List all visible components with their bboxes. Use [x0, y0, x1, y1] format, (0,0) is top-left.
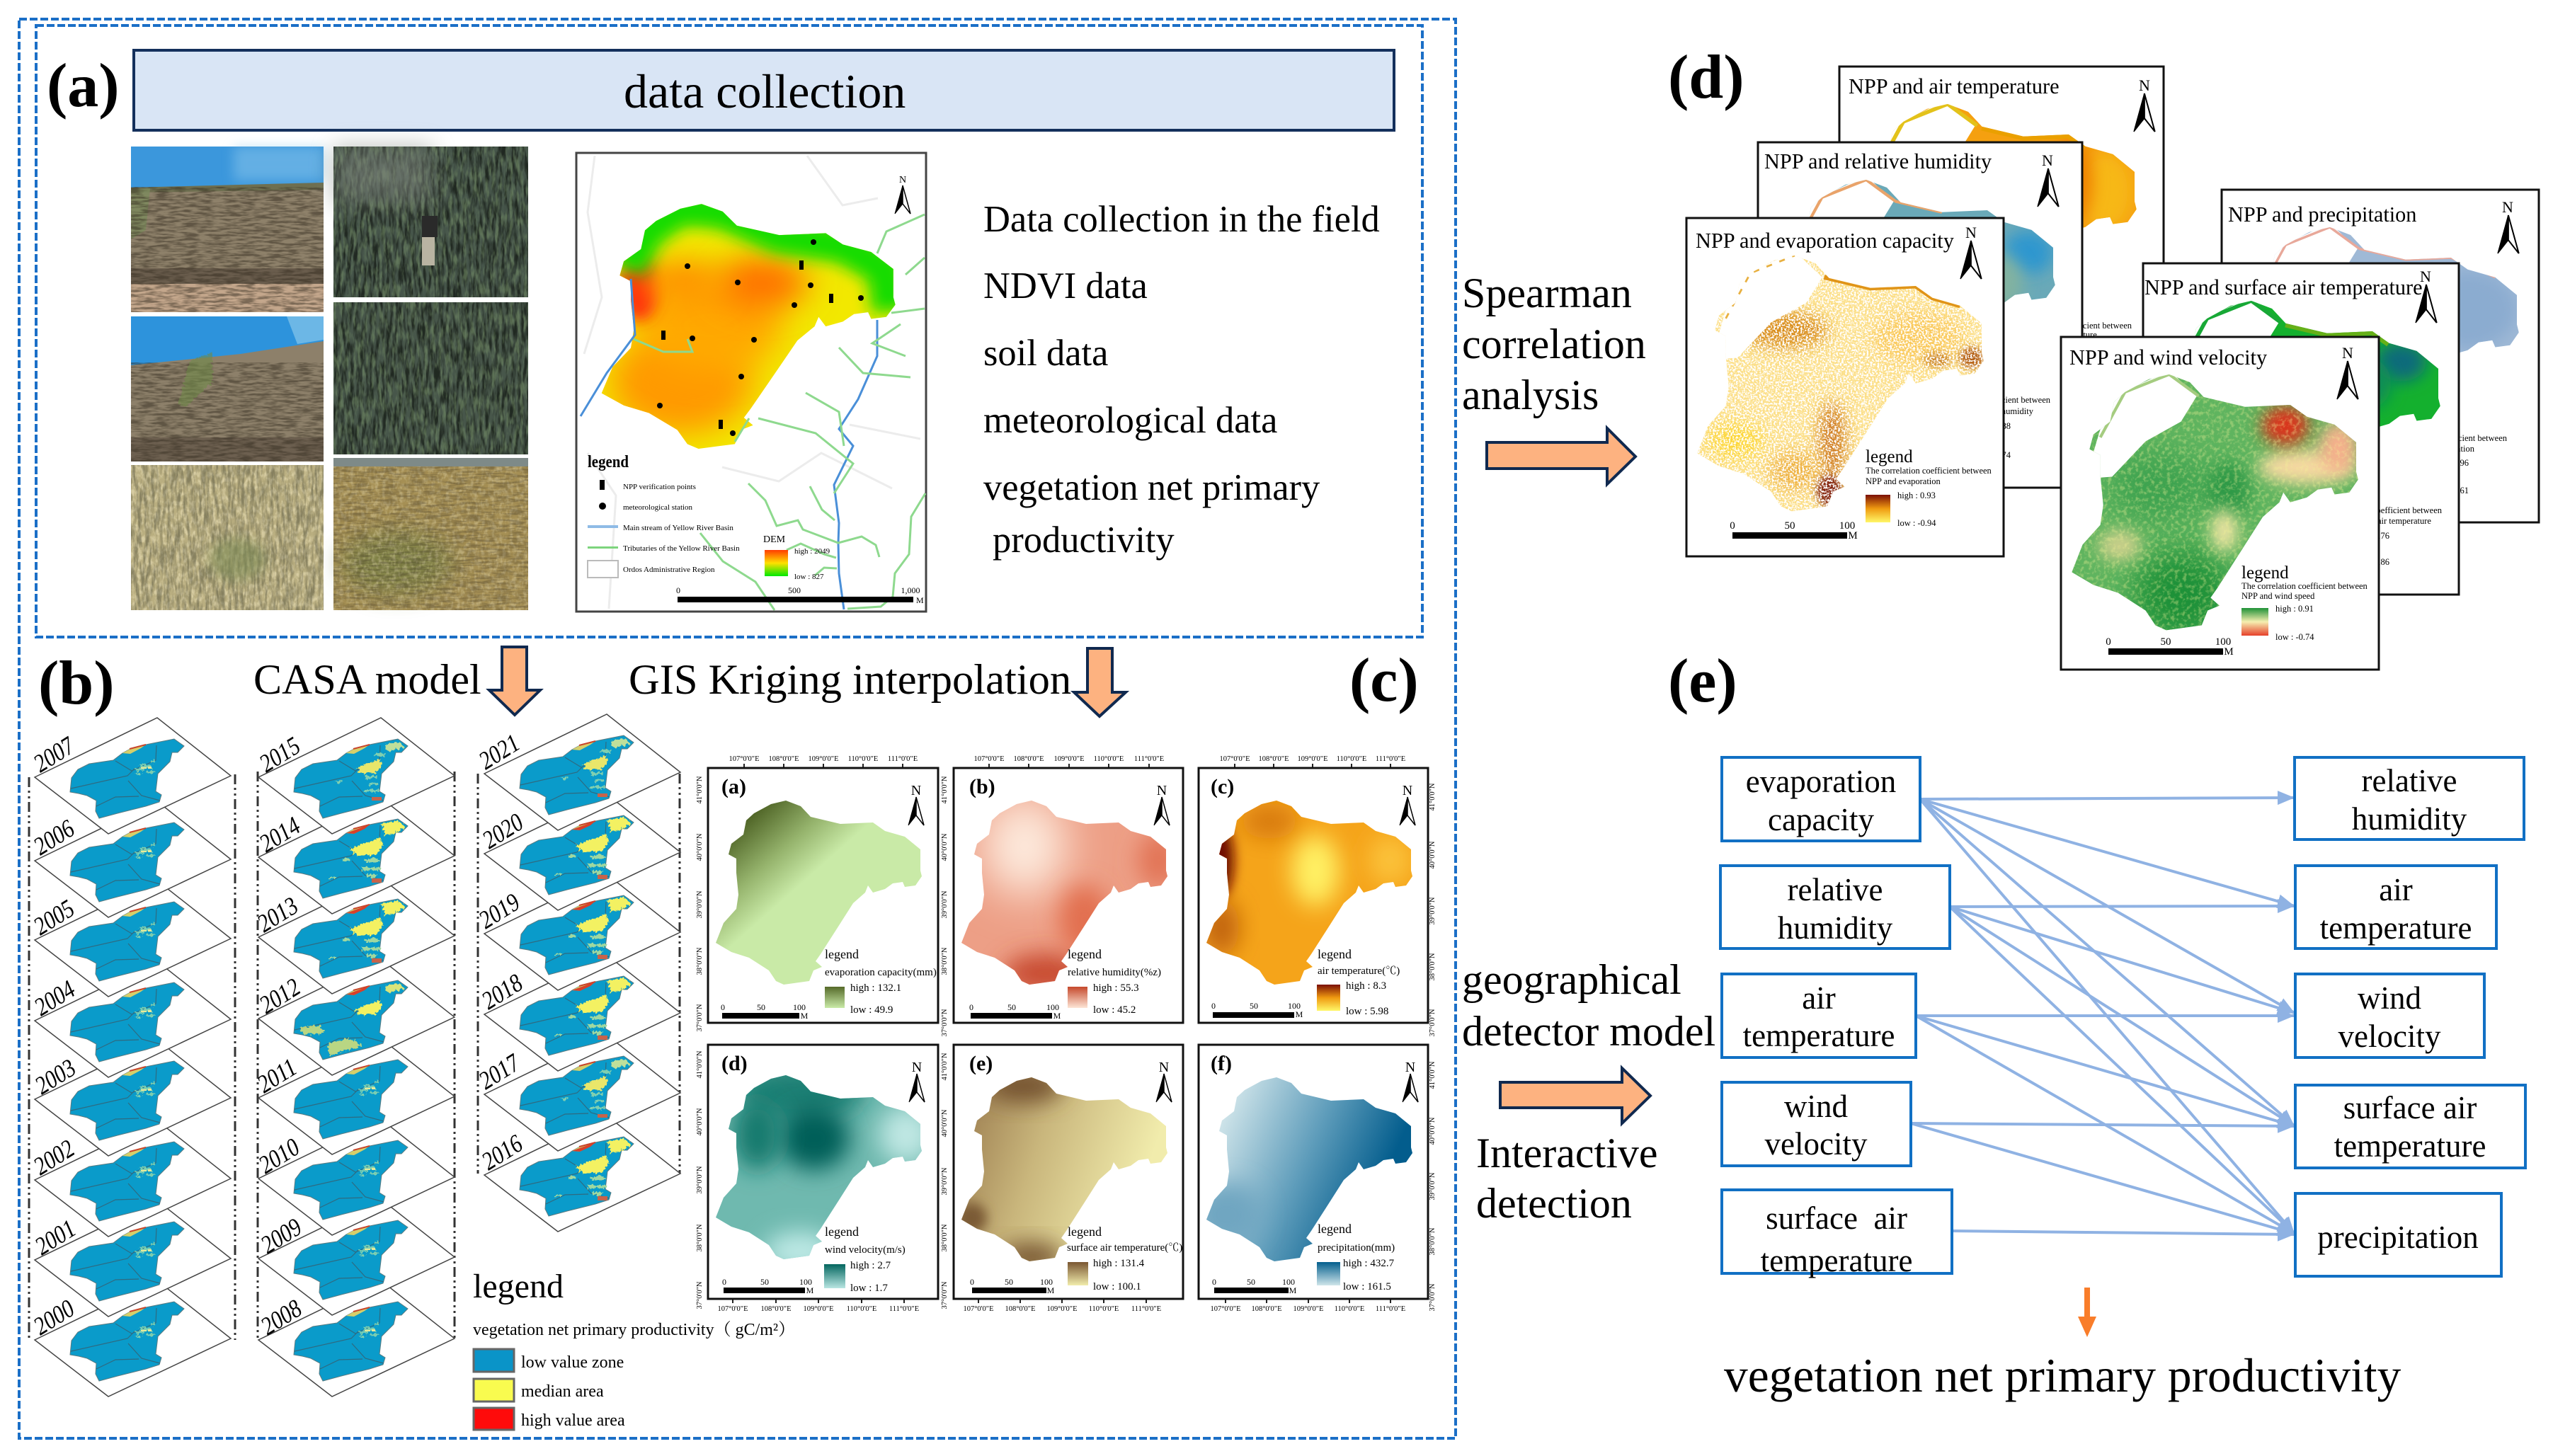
map panel (d): wind velocity: 0	[722, 1277, 726, 1287]
model label: CASA model: CASA model	[253, 656, 481, 703]
map panel (c): air temperature: N	[1403, 783, 1412, 798]
method label: Interactive detection	[1476, 1130, 1658, 1227]
stacked NPP maps 2008–2015: 2015	[254, 731, 305, 778]
map panel (c): air temperature: (c)	[1211, 775, 1234, 798]
map: NPP and evaporation capacity: 50	[1784, 520, 1795, 532]
factor boxes: left column: temperature	[1761, 1243, 1912, 1278]
map: NPP and evaporation capacity: 0	[1730, 520, 1735, 532]
axis labels and ticks of interpolation maps: 108°0'0"E	[1258, 755, 1289, 763]
arrow: to panel d	[1487, 428, 1635, 484]
map panel (f): precipitation	[1192, 1045, 1428, 1299]
field photo: tall shrubs	[333, 302, 528, 454]
axis labels and ticks of interpolation maps: 109°0'0"E	[808, 755, 839, 763]
map panel (e): surface air temperature: N	[1159, 1060, 1169, 1075]
axis labels and ticks of interpolation maps: 40°0'0"N	[1429, 841, 1437, 869]
axis labels and ticks of interpolation maps: 40°0'0"N	[941, 1109, 949, 1137]
field photo: slope with sky 1	[131, 147, 324, 312]
map: NPP and wind velocity: M	[2224, 646, 2234, 658]
map: NPP and wind velocity: 0	[2106, 636, 2111, 648]
factor boxes: left column: capacity	[1768, 802, 1874, 837]
map panel (a): evaporation capacity: N	[911, 783, 921, 798]
stacked NPP maps 2008–2015: 2008	[256, 1294, 307, 1341]
axis labels and ticks of interpolation maps: 111°0'0"E	[889, 1305, 919, 1313]
axis labels and ticks of interpolation maps: 110°0'0"E	[1337, 755, 1366, 763]
axis labels and ticks of interpolation maps: 39°0'0"N	[1429, 1172, 1437, 1200]
axis labels and ticks of interpolation maps: 37°0'0"N	[941, 1009, 949, 1036]
axis labels and ticks of interpolation maps: 41°0'0"N	[1429, 1061, 1437, 1089]
map: NPP and evaporation capacity: 100	[1839, 520, 1855, 532]
map panel (f): precipitation: legend	[1318, 1222, 1352, 1236]
axis labels and ticks of interpolation maps: 108°0'0"E	[1251, 1305, 1282, 1313]
axis labels and ticks of interpolation maps: 107°0'0"E	[963, 1305, 994, 1313]
axis labels and ticks of interpolation maps: 108°0'0"E	[1013, 755, 1044, 763]
panel letter (b): (b)	[38, 649, 115, 718]
map: NPP and surface air temperature: high : 0.76	[2351, 531, 2389, 541]
legend: NPP classes: legend	[473, 1268, 564, 1305]
map panel (f): precipitation: 50	[1247, 1277, 1255, 1287]
axis labels and ticks of interpolation maps: 108°0'0"E	[760, 1305, 792, 1313]
map: NPP and evaporation capacity: high : 0.93	[1897, 491, 1936, 500]
map panel (e): surface air temperature: 0	[970, 1277, 974, 1287]
axis labels and ticks of interpolation maps: 39°0'0"N	[696, 890, 704, 918]
legend: NPP classes	[473, 1268, 795, 1430]
axis labels and ticks of interpolation maps: 110°0'0"E	[848, 755, 878, 763]
map panel (d): wind velocity: low : 1.7	[850, 1283, 888, 1294]
arrow: CASA down	[489, 647, 540, 715]
axis labels and ticks of interpolation maps: 109°0'0"E	[1297, 755, 1328, 763]
stacked NPP maps 2000–2007: 2005	[28, 894, 79, 941]
map: NPP and wind velocity: NPP and wind velocity	[2069, 345, 2268, 369]
map: NPP and surface air temperature: The correlation coefficient between	[2316, 505, 2443, 515]
map panel (c): air temperature: 50	[1250, 1001, 1258, 1011]
map: NPP and wind velocity: high : 0.91	[2275, 604, 2314, 614]
axis labels and ticks of interpolation maps: 110°0'0"E	[1335, 1305, 1364, 1313]
map: NPP and surface air temperature: N	[2420, 268, 2431, 285]
map panel (d): wind velocity: (d)	[721, 1052, 748, 1075]
map panel (a): evaporation capacity: 50	[757, 1002, 765, 1012]
axis labels and ticks of interpolation maps: 40°0'0"N	[1429, 1117, 1437, 1145]
map: NPP and relative humidity: N	[2042, 151, 2053, 169]
map: NPP and precipitation: NPP and precipitation	[2397, 444, 2475, 454]
DEM map legend: 0	[676, 585, 680, 595]
method label: Spearman correlation analysis: correlation	[1462, 321, 1646, 367]
map: NPP and relative humidity: The correlation coefficient between	[1924, 395, 2051, 405]
map panel (c): air temperature	[1199, 768, 1428, 1023]
DEM map legend: low : 827	[794, 573, 824, 581]
data type list: productivity	[993, 520, 1175, 561]
map: NPP and air temperature: NPP and air temperature	[2010, 330, 2097, 340]
map panel (e): surface air temperature: 50	[1005, 1277, 1013, 1287]
map: NPP and wind velocity: 50	[2161, 636, 2171, 648]
map: NPP and wind velocity: NPP and wind speed	[2241, 591, 2315, 601]
factor boxes: right column: temperature	[2334, 1128, 2486, 1164]
field photo: slope with sky 2	[131, 316, 324, 462]
axis labels and ticks of interpolation maps: 39°0'0"N	[1429, 897, 1437, 924]
method label: Spearman correlation analysis	[1462, 270, 1646, 418]
map panel (d): wind velocity	[708, 1045, 938, 1299]
axis labels and ticks of interpolation maps: 40°0'0"N	[696, 833, 704, 861]
factor boxes: right column	[2295, 757, 2525, 1276]
map panel (e): surface air temperature	[954, 1045, 1183, 1299]
north arrow	[895, 175, 910, 214]
map: NPP and surface air temperature: NPP and surface air temperature	[2317, 516, 2431, 526]
arrow: result down	[2078, 1288, 2096, 1337]
stacked NPP maps 2016–2021	[474, 714, 680, 1232]
map panel (a): evaporation capacity: low : 49.9	[850, 1004, 893, 1016]
stacked NPP maps 2008–2015: 2014	[254, 811, 305, 858]
map: NPP and relative humidity	[1758, 142, 2082, 488]
map: NPP and wind velocity: low : -0.74	[2275, 632, 2314, 642]
method label: geographical detector model	[1462, 956, 1715, 1055]
map: NPP and precipitation: The correlation coefficient between	[2381, 433, 2508, 443]
map panel (d): wind velocity: M	[806, 1285, 814, 1295]
DEM map legend: legend	[588, 453, 629, 471]
map panel (a): evaporation capacity: 100	[793, 1002, 806, 1012]
inner dashed frame: data collection	[36, 25, 1422, 637]
method label: Spearman correlation analysis: Spearman	[1462, 270, 1632, 316]
factor boxes: right column: velocity	[2338, 1019, 2441, 1054]
map panel (f): precipitation: (f)	[1211, 1052, 1232, 1075]
map: NPP and relative humidity: high : 0.88	[1972, 421, 2011, 431]
axis labels and ticks of interpolation maps: 107°0'0"E	[1210, 1305, 1241, 1313]
map panel (f): precipitation: M	[1289, 1285, 1297, 1295]
axis labels and ticks of interpolation maps: 109°0'0"E	[1053, 755, 1085, 763]
map panel (c): air temperature: legend	[1318, 947, 1352, 961]
factor boxes: left column: air	[1802, 980, 1836, 1016]
map: NPP and evaporation capacity: legend	[1866, 447, 1913, 466]
map panel (a): evaporation capacity: 0	[721, 1002, 725, 1012]
factor boxes: right column: temperature	[2320, 910, 2472, 946]
map panel (c): air temperature: M	[1296, 1009, 1303, 1019]
map: NPP and evaporation capacity: N	[1965, 224, 1977, 241]
map panel (f): precipitation: N	[1405, 1060, 1415, 1075]
legend: NPP classes: high value area	[521, 1411, 625, 1430]
map: NPP and precipitation: NPP and precipitation	[2228, 202, 2416, 227]
stacked NPP maps 2008–2015: 2009	[256, 1213, 307, 1259]
axis labels and ticks of interpolation maps: 111°0'0"E	[1376, 755, 1405, 763]
map panel (b): relative humidity: low : 45.2	[1093, 1004, 1136, 1016]
map: NPP and surface air temperature: NPP and surface air temperature	[2144, 275, 2423, 299]
legend: NPP classes: vegetation net primary productivity（ gC/m²）	[473, 1321, 795, 1339]
factor boxes: left column: surface air	[1766, 1200, 1907, 1236]
factor boxes: left column: wind	[1784, 1089, 1848, 1124]
map panel (a): evaporation capacity: legend	[825, 947, 859, 961]
map: NPP and wind velocity	[2061, 337, 2379, 670]
map panel (e): surface air temperature: low : 100.1	[1093, 1281, 1141, 1292]
axis labels and ticks of interpolation maps: 111°0'0"E	[1134, 755, 1164, 763]
data type list: NDVI data	[983, 265, 1148, 306]
map panel (b): relative humidity: high : 55.3	[1093, 982, 1139, 994]
DEM map legend: NPP verification points	[623, 483, 696, 491]
axis labels and ticks of interpolation maps: 39°0'0"N	[941, 890, 949, 918]
map: NPP and evaporation capacity: low : -0.94	[1897, 518, 1936, 528]
map: NPP and air temperature: NPP and air temperature	[1849, 74, 2060, 98]
map panel (c): air temperature: low : 5.98	[1346, 1006, 1388, 1017]
map: NPP and air temperature	[1839, 67, 2164, 405]
map: NPP and wind velocity: N	[2342, 344, 2353, 362]
map panel (b): relative humidity: 0	[969, 1002, 973, 1012]
axis labels and ticks of interpolation maps: 38°0'0"N	[696, 1224, 704, 1251]
map panel (d): wind velocity: N	[912, 1060, 922, 1075]
map panel (f): precipitation: 0	[1212, 1277, 1216, 1287]
stacked NPP maps 2000–2007: 2006	[28, 814, 80, 861]
map: NPP and wind velocity: 100	[2215, 636, 2231, 648]
stacked NPP maps 2008–2015: 2011	[252, 1053, 302, 1099]
data type list: soil data	[983, 333, 1108, 374]
axis labels and ticks of interpolation maps: 38°0'0"N	[1429, 953, 1437, 980]
stacked NPP maps 2008–2015	[252, 718, 455, 1397]
axis labels and ticks of interpolation maps: 38°0'0"N	[696, 947, 704, 975]
method label: geographical detector model: geographical	[1462, 956, 1681, 1003]
factor boxes: left column: humidity	[1778, 910, 1893, 946]
factor boxes: left column	[1720, 757, 1952, 1278]
factor boxes: right column: wind	[2358, 980, 2421, 1016]
map panel (f): precipitation: 100	[1282, 1277, 1295, 1287]
DEM map legend: high : 2049	[794, 547, 830, 556]
stacked NPP maps 2016–2021: 2021	[474, 728, 525, 775]
map panel (c): air temperature: 100	[1288, 1001, 1301, 1011]
stacked NPP maps 2016–2021: 2016	[476, 1129, 528, 1176]
map panel (b): relative humidity: M	[1053, 1011, 1061, 1021]
stacked NPP maps 2008–2015: 2010	[253, 1133, 305, 1179]
axis labels and ticks of interpolation maps: 38°0'0"N	[941, 947, 949, 975]
map panel (c): air temperature: air temperature(℃)	[1318, 965, 1400, 977]
map panel (d): wind velocity: high : 2.7	[850, 1260, 891, 1271]
map: NPP and wind velocity: legend	[2241, 563, 2289, 583]
data type list: vegetation net primary	[983, 467, 1320, 508]
map panel (e): surface air temperature: (e)	[969, 1052, 993, 1075]
axis labels and ticks of interpolation maps: 37°0'0"N	[1429, 1009, 1437, 1036]
stacked NPP maps 2016–2021: 2018	[476, 968, 528, 1015]
DEM map legend: Ordos Administrative Region	[623, 566, 715, 574]
method label: geographical detector model: detector model	[1462, 1008, 1715, 1055]
map: NPP and precipitation: high : 0.96	[2431, 458, 2469, 468]
panel letter (e): (e)	[1668, 647, 1737, 716]
map: NPP and precipitation: N	[2502, 198, 2513, 216]
axis labels and ticks of interpolation maps: 110°0'0"E	[1094, 755, 1124, 763]
outer dashed frame: panels a, b, c	[19, 19, 1456, 1438]
map: NPP and surface air temperature: low : -0.86	[2351, 557, 2389, 567]
heading bar: data collection	[134, 50, 1394, 130]
map: NPP and wind velocity: The correlation coefficient between	[2241, 581, 2368, 591]
map panel (f): precipitation: precipitation(mm)	[1318, 1242, 1395, 1254]
field photo: dry grassland	[131, 465, 324, 610]
stacked NPP maps 2000–2007: 2000	[28, 1294, 80, 1341]
axis labels and ticks of interpolation maps: 110°0'0"E	[1089, 1305, 1119, 1313]
map panel (f): precipitation: low : 161.5	[1343, 1281, 1391, 1292]
map: NPP and evaporation capacity: The correlation coefficient between	[1866, 466, 1992, 476]
axis labels and ticks of interpolation maps: 38°0'0"N	[1429, 1227, 1437, 1255]
map panel (e): surface air temperature: surface air temperature(℃)	[1067, 1242, 1182, 1254]
map panel (b): relative humidity: 50	[1007, 1002, 1016, 1012]
north arrow: N	[899, 175, 906, 185]
axis labels and ticks of interpolation maps: 38°0'0"N	[941, 1224, 949, 1251]
legend: NPP classes: median area	[521, 1382, 604, 1401]
map panel (b): relative humidity: relative humidity(%z)	[1068, 967, 1161, 978]
stacked NPP maps 2000–2007: 2004	[29, 975, 80, 1021]
axis labels and ticks of interpolation maps: 41°0'0"N	[941, 1053, 949, 1080]
axis labels and ticks of interpolation maps: 109°0'0"E	[803, 1305, 834, 1313]
map: NPP and relative humidity: NPP and relative humidity	[1939, 406, 2034, 416]
factor boxes: left column: evaporation	[1746, 764, 1896, 799]
axis labels and ticks of interpolation maps: 40°0'0"N	[941, 833, 949, 861]
map panel (c): air temperature: high : 8.3	[1346, 980, 1386, 992]
stacked NPP maps 2016–2021: 2019	[474, 888, 525, 934]
method label: Interactive detection: detection	[1476, 1180, 1632, 1227]
rivers	[581, 279, 877, 609]
map: NPP and surface air temperature	[2143, 263, 2459, 595]
stacked NPP maps 2008–2015: 2013	[252, 891, 303, 938]
stacked NPP maps 2016–2021: 2017	[474, 1048, 526, 1095]
data type list: Data collection in the field	[983, 199, 1380, 240]
panel letter (a): (a)	[47, 52, 120, 120]
map panel (f): precipitation: high : 432.7	[1343, 1258, 1395, 1269]
axis labels and ticks of interpolation maps: 37°0'0"N	[941, 1281, 949, 1309]
field photo: open field	[333, 458, 528, 610]
stacked NPP maps 2008–2015: 2012	[254, 973, 305, 1019]
sample points	[657, 239, 864, 436]
map: NPP and relative humidity: NPP and relative humidity	[1764, 149, 1992, 173]
map panel (c): air temperature: 0	[1211, 1001, 1216, 1011]
map panel (e): surface air temperature: legend	[1068, 1225, 1102, 1239]
map: NPP and air temperature: The correlation coefficient between	[2006, 321, 2132, 331]
interaction arrows	[1911, 798, 2295, 1234]
factor boxes: left column: velocity	[1765, 1126, 1868, 1162]
map: NPP and evaporation capacity: NPP and evaporation	[1866, 476, 1941, 486]
panel letter (c): (c)	[1349, 646, 1419, 715]
factor boxes: left column: relative	[1788, 872, 1883, 907]
factor boxes: right column: air	[2379, 872, 2413, 907]
map: DEM and sample sites	[576, 153, 926, 612]
method label: Interactive detection: Interactive	[1476, 1130, 1658, 1176]
map panel (a): evaporation capacity: M	[801, 1011, 809, 1021]
axis labels and ticks of interpolation maps: 107°0'0"E	[729, 755, 760, 763]
DEM map legend: 500	[788, 585, 801, 595]
factor boxes: right column: precipitation	[2317, 1220, 2479, 1255]
data type list	[983, 199, 1380, 561]
map panel (b): relative humidity: 100	[1046, 1002, 1059, 1012]
DEM map legend: Main stream of Yellow River Basin	[623, 524, 733, 532]
factor boxes: right column: humidity	[2352, 801, 2467, 837]
DEM map legend: 1,000	[901, 585, 920, 595]
axis labels and ticks of interpolation maps: 111°0'0"E	[1376, 1305, 1405, 1313]
axis labels and ticks of interpolation maps: 110°0'0"E	[847, 1305, 876, 1313]
axis labels and ticks of interpolation maps: 41°0'0"N	[696, 776, 704, 803]
axis labels and ticks of interpolation maps: 39°0'0"N	[696, 1166, 704, 1193]
axis labels and ticks of interpolation maps	[696, 755, 1437, 1313]
map panel (b): relative humidity: N	[1157, 783, 1167, 798]
map panel (a): evaporation capacity: evaporation capacity(mm)	[825, 967, 937, 978]
map panel (e): surface air temperature: M	[1047, 1285, 1055, 1295]
DEM map legend	[588, 453, 924, 605]
axis labels and ticks of interpolation maps: 107°0'0"E	[973, 755, 1005, 763]
map: NPP and evaporation capacity: NPP and evaporation capacity	[1696, 229, 1955, 253]
map: NPP and air temperature: N	[2139, 76, 2150, 94]
map panel (e): surface air temperature: 100	[1040, 1277, 1053, 1287]
map panel (a): evaporation capacity: high : 132.1	[850, 982, 901, 994]
axis labels and ticks of interpolation maps: 37°0'0"N	[696, 1281, 704, 1309]
DEM map legend: DEM	[763, 534, 786, 545]
stacked NPP maps 2000–2007: 2007	[28, 731, 81, 778]
stacked NPP maps 2000–2007	[28, 718, 235, 1397]
legend: NPP classes: low value zone	[521, 1353, 624, 1372]
axis labels and ticks of interpolation maps: 107°0'0"E	[717, 1305, 748, 1313]
axis labels and ticks of interpolation maps: 111°0'0"E	[888, 755, 918, 763]
DEM map legend: Tributaries of the Yellow River Basin	[623, 544, 740, 553]
axis labels and ticks of interpolation maps: 37°0'0"N	[696, 1004, 704, 1031]
factor boxes: right column: relative	[2362, 763, 2457, 798]
map panel (d): wind velocity: 100	[799, 1277, 812, 1287]
map panel (b): relative humidity: (b)	[969, 775, 995, 798]
axis labels and ticks of interpolation maps: 41°0'0"N	[941, 776, 949, 803]
method label: Spearman correlation analysis: analysis	[1462, 372, 1599, 418]
axis labels and ticks of interpolation maps: 111°0'0"E	[1131, 1305, 1161, 1313]
axis labels and ticks of interpolation maps: 108°0'0"E	[768, 755, 799, 763]
result label: vegetation net primary productivity: vegetation net primary productivity	[1724, 1349, 2401, 1402]
stacked NPP maps 2000–2007: 2001	[30, 1214, 81, 1261]
axis labels and ticks of interpolation maps: 107°0'0"E	[1219, 755, 1250, 763]
heading bar: data collection: data collection	[624, 64, 906, 118]
axis labels and ticks of interpolation maps: 109°0'0"E	[1046, 1305, 1078, 1313]
factor boxes: left column: temperature	[1743, 1018, 1895, 1053]
axis labels and ticks of interpolation maps: 40°0'0"N	[696, 1108, 704, 1135]
axis labels and ticks of interpolation maps: 41°0'0"N	[1429, 783, 1437, 810]
map panel (e): surface air temperature: high : 131.4	[1093, 1258, 1145, 1269]
axis labels and ticks of interpolation maps: 37°0'0"N	[1429, 1283, 1437, 1311]
DEM map legend: meteorological station	[623, 503, 693, 512]
map: NPP and relative humidity: low : -0.74	[1972, 450, 2011, 460]
field photo: instrument among shrubs	[333, 147, 528, 297]
map panel (d): wind velocity: legend	[825, 1225, 859, 1239]
DEM map legend: M	[916, 595, 924, 605]
map panel (a): evaporation capacity: (a)	[721, 775, 746, 798]
model label: GIS Kriging interpolation: GIS Kriging interpolation	[629, 656, 1071, 704]
arrow: Kriging down	[1074, 648, 1126, 716]
data type list: meteorological data	[983, 400, 1277, 441]
factor boxes: right column: surface air	[2343, 1090, 2477, 1125]
map: NPP and precipitation: low : -0.61	[2430, 486, 2469, 495]
DEM elevation surface	[590, 198, 903, 452]
axis labels and ticks of interpolation maps: 108°0'0"E	[1005, 1305, 1036, 1313]
panel letter (d): (d)	[1668, 43, 1744, 112]
stacked NPP maps 2000–2007: 2003	[30, 1053, 81, 1100]
map panel (b): relative humidity	[954, 768, 1183, 1023]
map panel (a): evaporation capacity	[708, 768, 938, 1023]
map panel (b): relative humidity: legend	[1068, 947, 1102, 961]
axis labels and ticks of interpolation maps: 41°0'0"N	[696, 1050, 704, 1078]
stacked NPP maps 2016–2021: 2020	[477, 808, 529, 854]
map: NPP and evaporation capacity: M	[1848, 530, 1858, 541]
map panel (d): wind velocity: 50	[760, 1277, 769, 1287]
map: NPP and precipitation	[2222, 190, 2539, 522]
map panel (d): wind velocity: wind velocity(m/s)	[825, 1244, 906, 1256]
arrow: to panel e	[1500, 1068, 1650, 1123]
axis labels and ticks of interpolation maps: 109°0'0"E	[1293, 1305, 1324, 1313]
stacked NPP maps 2000–2007: 2002	[28, 1134, 79, 1181]
axis labels and ticks of interpolation maps: 39°0'0"N	[941, 1167, 949, 1195]
map: NPP and evaporation capacity	[1686, 218, 2004, 556]
